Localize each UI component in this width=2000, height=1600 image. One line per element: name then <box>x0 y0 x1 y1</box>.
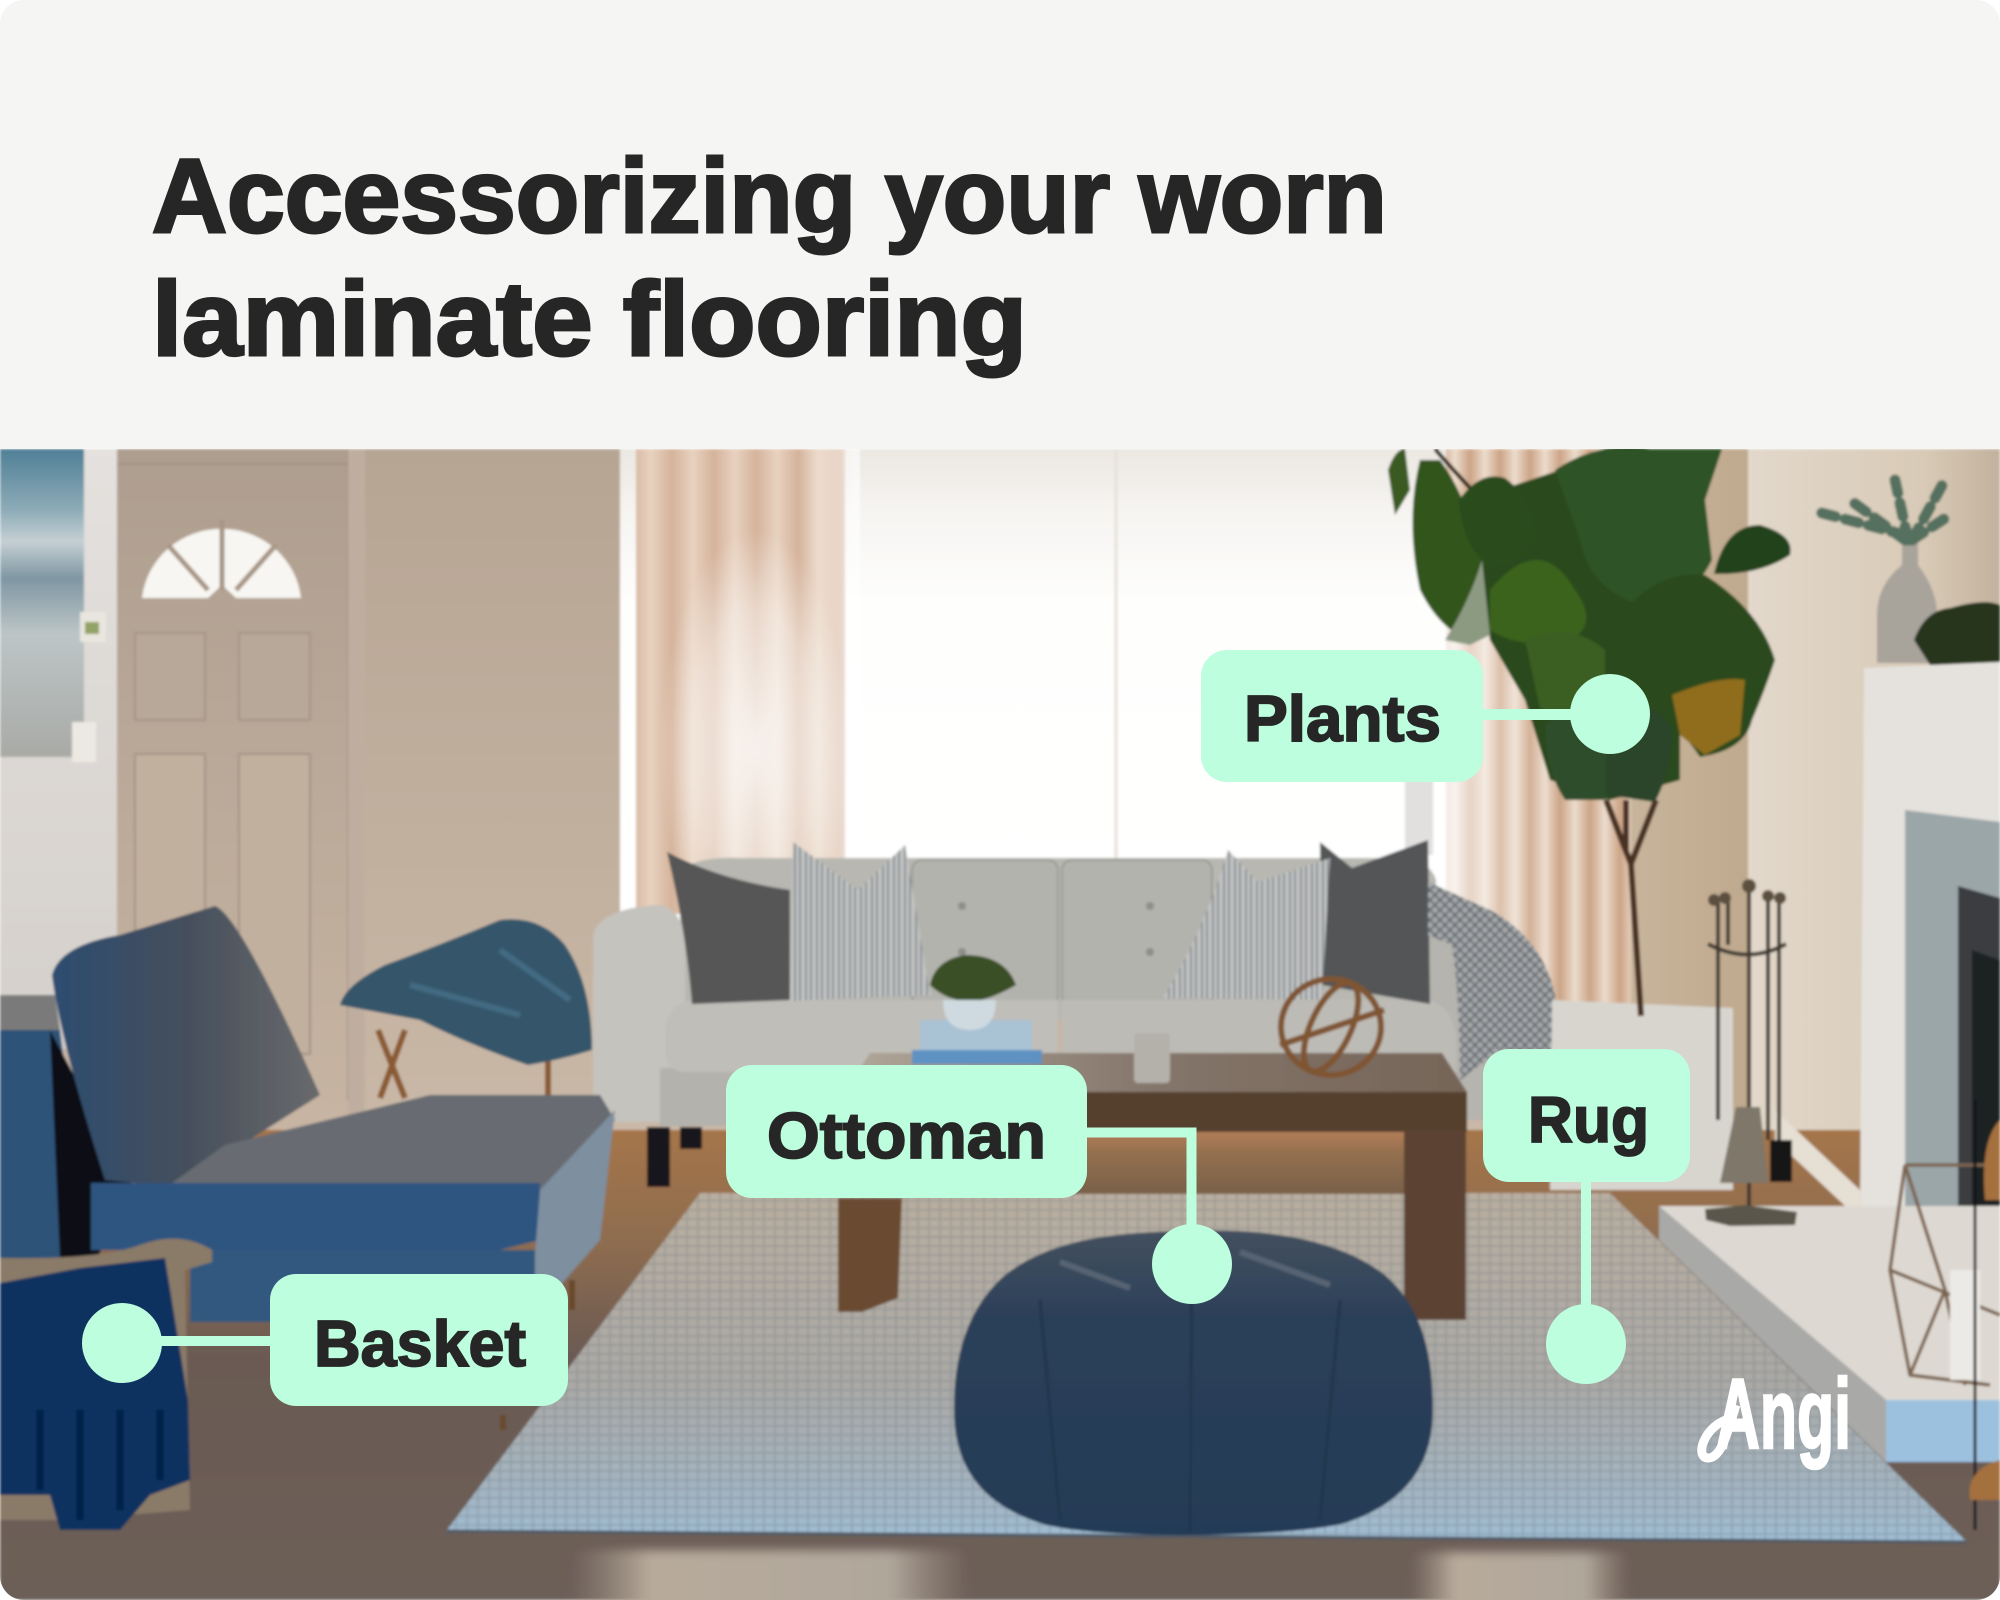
label text: Basket <box>314 1307 526 1380</box>
rug <box>447 1193 1966 1542</box>
striped pillow left <box>790 842 931 1001</box>
sofa back <box>680 858 1436 1020</box>
plant foliage mass <box>1470 470 1680 800</box>
fire tools <box>1705 879 1797 1226</box>
header panel <box>0 0 2000 449</box>
sofa seat right <box>1062 1000 1456 1072</box>
callout: plants <box>1201 650 1650 782</box>
callout: ottoman <box>726 1065 1232 1304</box>
connector line <box>150 1336 275 1346</box>
tool base <box>1705 1205 1797 1226</box>
right curtain <box>1446 449 1636 1010</box>
left curtain <box>636 449 860 970</box>
black stand <box>1974 1100 1976 1530</box>
chair seat side <box>530 1110 615 1320</box>
label text: Plants <box>1244 682 1441 755</box>
small plant in pot <box>930 955 1016 1030</box>
sofa <box>593 840 1556 1187</box>
fireplace <box>1659 662 2000 1462</box>
living room photo scene <box>0 447 2000 1600</box>
firebox inner <box>1972 950 2000 1260</box>
armillary sphere <box>1280 975 1384 1079</box>
door arch window <box>142 520 301 598</box>
table left leg <box>838 1198 902 1312</box>
dark pillow left <box>667 852 790 1004</box>
chair legs <box>503 1280 572 1430</box>
chair front cushion <box>91 1183 540 1250</box>
label text: Rug <box>1528 1083 1649 1156</box>
dark pillow right <box>1320 840 1430 1004</box>
basket with blanket <box>0 1239 212 1530</box>
chair seat top <box>90 1095 615 1220</box>
window <box>620 449 1450 959</box>
sofa base <box>660 1068 734 1127</box>
sofa legs <box>647 1127 702 1187</box>
books <box>912 1020 1042 1064</box>
marker dot <box>1570 674 1650 754</box>
title: Accessorizing your worn <box>152 138 1387 255</box>
small stool and folded blanket <box>340 919 592 1098</box>
chair upper arm <box>0 995 60 1030</box>
left white wall <box>0 449 118 1049</box>
wall art <box>0 449 84 757</box>
hearth side <box>1659 1206 1886 1462</box>
striped pillow right <box>1163 850 1330 1000</box>
chair dark gap <box>50 1030 135 1270</box>
connector line <box>1581 1175 1591 1315</box>
plant branch <box>1435 449 1540 560</box>
table front <box>1087 1090 1468 1134</box>
sofa arm <box>593 905 685 1122</box>
connector line <box>1080 1132 1192 1240</box>
sofa right arm <box>1434 937 1489 1120</box>
label box <box>1483 1049 1690 1182</box>
wire lantern <box>1890 1165 2000 1385</box>
knit throw <box>1428 882 1556 1080</box>
door panels <box>135 633 310 1054</box>
title: laminate flooring <box>152 261 1027 378</box>
sofa tuft buttons <box>958 902 1154 956</box>
plant leaves <box>1388 447 1791 802</box>
vase with sprigs <box>1818 480 1950 663</box>
door <box>117 449 365 1149</box>
label box <box>726 1065 1087 1198</box>
plant pot <box>1550 1000 1733 1190</box>
fiddle leaf plant <box>1388 447 1791 1190</box>
blind glimpses <box>1405 780 1433 855</box>
logo: Angi: Angi <box>1716 1358 1851 1469</box>
under table opening <box>1074 1132 1406 1195</box>
connector line <box>1475 709 1585 720</box>
baseboard <box>1775 1110 1860 1220</box>
logo: Angi <box>1702 1358 1851 1469</box>
vase at right edge <box>1969 1120 2000 1500</box>
floor <box>0 1130 2000 1600</box>
callout: rug <box>1483 1049 1690 1384</box>
tabletop decor <box>912 955 1384 1083</box>
floor reflections <box>570 1550 1630 1600</box>
callout: basket <box>82 1274 568 1406</box>
label box <box>270 1274 568 1406</box>
hearth blue edge <box>1886 1400 2000 1462</box>
corner wall <box>1746 449 2000 1132</box>
chair base <box>190 1250 535 1322</box>
table top <box>845 1053 1467 1092</box>
title <box>152 138 1387 378</box>
plant trunk <box>1606 800 1656 1016</box>
blue velvet chair <box>0 906 615 1430</box>
label box <box>1201 650 1483 782</box>
firebox surround <box>1905 810 2000 1240</box>
tool shafts <box>1708 885 1786 1207</box>
firebox <box>1958 886 2000 1260</box>
mantel <box>1860 662 2000 1210</box>
pouf ottoman <box>954 1231 1433 1535</box>
thermostat and switch <box>72 612 106 762</box>
back wall <box>60 449 1552 1132</box>
brush <box>1770 1140 1792 1182</box>
tool knobs <box>1708 879 1786 906</box>
chair left arm <box>0 1030 90 1270</box>
chair back cushion <box>52 906 320 1186</box>
label text: Ottoman <box>767 1099 1046 1172</box>
marker dot <box>82 1303 162 1383</box>
hearth <box>1659 1206 2000 1400</box>
mantel plant <box>1914 602 2000 700</box>
sofa seat left <box>665 1000 1058 1072</box>
candle <box>1134 1033 1170 1083</box>
sprig leaves <box>1818 480 1950 540</box>
table right leg <box>1404 1130 1466 1320</box>
coffee table <box>838 1053 1467 1320</box>
sofa back cushions <box>912 860 1212 1006</box>
marker dot <box>1152 1224 1232 1304</box>
shovel <box>1720 1107 1768 1183</box>
marker dot <box>1546 1304 1626 1384</box>
right wall <box>1630 450 1748 1115</box>
